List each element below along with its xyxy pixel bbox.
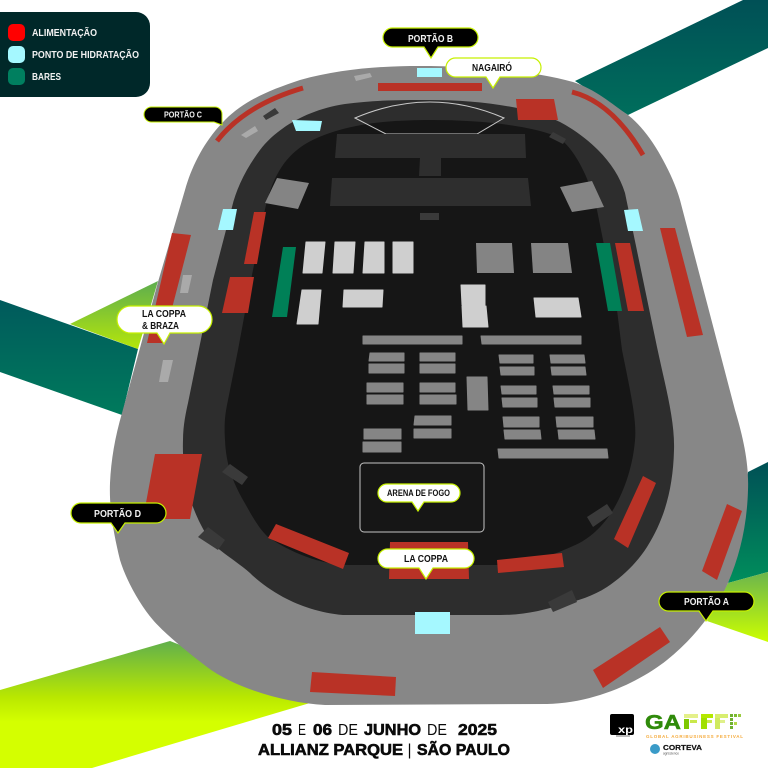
stadium field bbox=[225, 120, 635, 565]
logo: GAFFFF festival bbox=[645, 712, 743, 739]
logo: Corteva: agriscience bbox=[663, 752, 679, 756]
event date line: DE bbox=[338, 722, 358, 739]
event date line: DE bbox=[427, 722, 447, 739]
callout: La Coppa & Braza: LA COPPA bbox=[142, 309, 186, 320]
stage outline bbox=[355, 102, 504, 134]
logo: Corteva: CORTEVA bbox=[663, 743, 703, 752]
background: right teal band bbox=[728, 462, 768, 583]
light gray markers bbox=[159, 73, 372, 382]
event venue line bbox=[258, 741, 510, 759]
legend panel: PONTO DE HIDRATAÇÃO bbox=[32, 48, 139, 61]
callout: Portão B bbox=[383, 28, 478, 58]
tilted gray blocks bbox=[265, 178, 604, 273]
logo: GAFFFF festival: GA bbox=[645, 712, 681, 734]
background: bottom left lime band bbox=[0, 641, 320, 768]
background: left lime wedge bbox=[70, 281, 158, 349]
gray seating rows bbox=[363, 336, 608, 458]
callout: Arena de Fogo: ARENA DE FOGO bbox=[387, 488, 450, 498]
dark access markers bbox=[198, 108, 613, 612]
background: left teal band bbox=[0, 300, 138, 415]
callout: Portão D: PORTÃO D bbox=[94, 507, 141, 520]
callout: Portão B: PORTÃO B bbox=[408, 32, 453, 45]
light gray sectors bbox=[297, 242, 581, 327]
callout: Arena de Fogo bbox=[378, 484, 460, 511]
callout: La Coppa & Braza bbox=[117, 306, 212, 344]
callout: Nagairó bbox=[446, 58, 541, 88]
logo: GAFFFF festival: GLOBAL AGRIBUSINESS FESTIVAL bbox=[646, 734, 743, 739]
event venue line: ALLIANZ PARQUE bbox=[258, 742, 403, 759]
event date line: E bbox=[298, 722, 306, 739]
legend panel: BARES bbox=[32, 71, 61, 83]
background: top right teal band bbox=[575, 0, 768, 115]
stadium stands ring bbox=[183, 100, 674, 615]
logo: XP: xp bbox=[618, 725, 633, 736]
callout: La Coppa: LA COPPA bbox=[404, 553, 448, 565]
callout: Nagairó: NAGAIRÓ bbox=[472, 61, 512, 74]
legend panel: ALIMENTAÇÃO bbox=[32, 26, 97, 39]
legend panel bbox=[0, 12, 150, 97]
event date line: JUNHO bbox=[364, 722, 421, 739]
background: right lime wedge bbox=[707, 572, 768, 642]
food areas (alimentação) bbox=[143, 83, 742, 696]
hydration points bbox=[218, 68, 643, 634]
bars bbox=[272, 243, 622, 317]
event date line: 2025 bbox=[458, 722, 497, 739]
callout: Portão D bbox=[71, 503, 166, 533]
arena de fogo outline bbox=[360, 463, 484, 532]
event venue line: | bbox=[408, 742, 412, 759]
callout: Portão C: PORTÃO C bbox=[164, 110, 202, 120]
logo: XP bbox=[610, 714, 634, 736]
callout: Portão A: PORTÃO A bbox=[684, 595, 729, 608]
callout: Portão C bbox=[144, 107, 222, 125]
callout: Portão A bbox=[659, 592, 754, 621]
logo: Corteva bbox=[650, 743, 703, 756]
stage structures bbox=[330, 134, 531, 220]
event date line bbox=[272, 722, 497, 739]
event venue line: SÃO PAULO bbox=[417, 741, 510, 759]
callout: La Coppa & Braza: & BRAZA bbox=[142, 321, 179, 332]
event date line: 06 bbox=[313, 722, 332, 739]
event date line: 05 bbox=[272, 722, 292, 739]
callout: La Coppa bbox=[378, 549, 474, 579]
stadium outer concourse bbox=[110, 66, 748, 705]
